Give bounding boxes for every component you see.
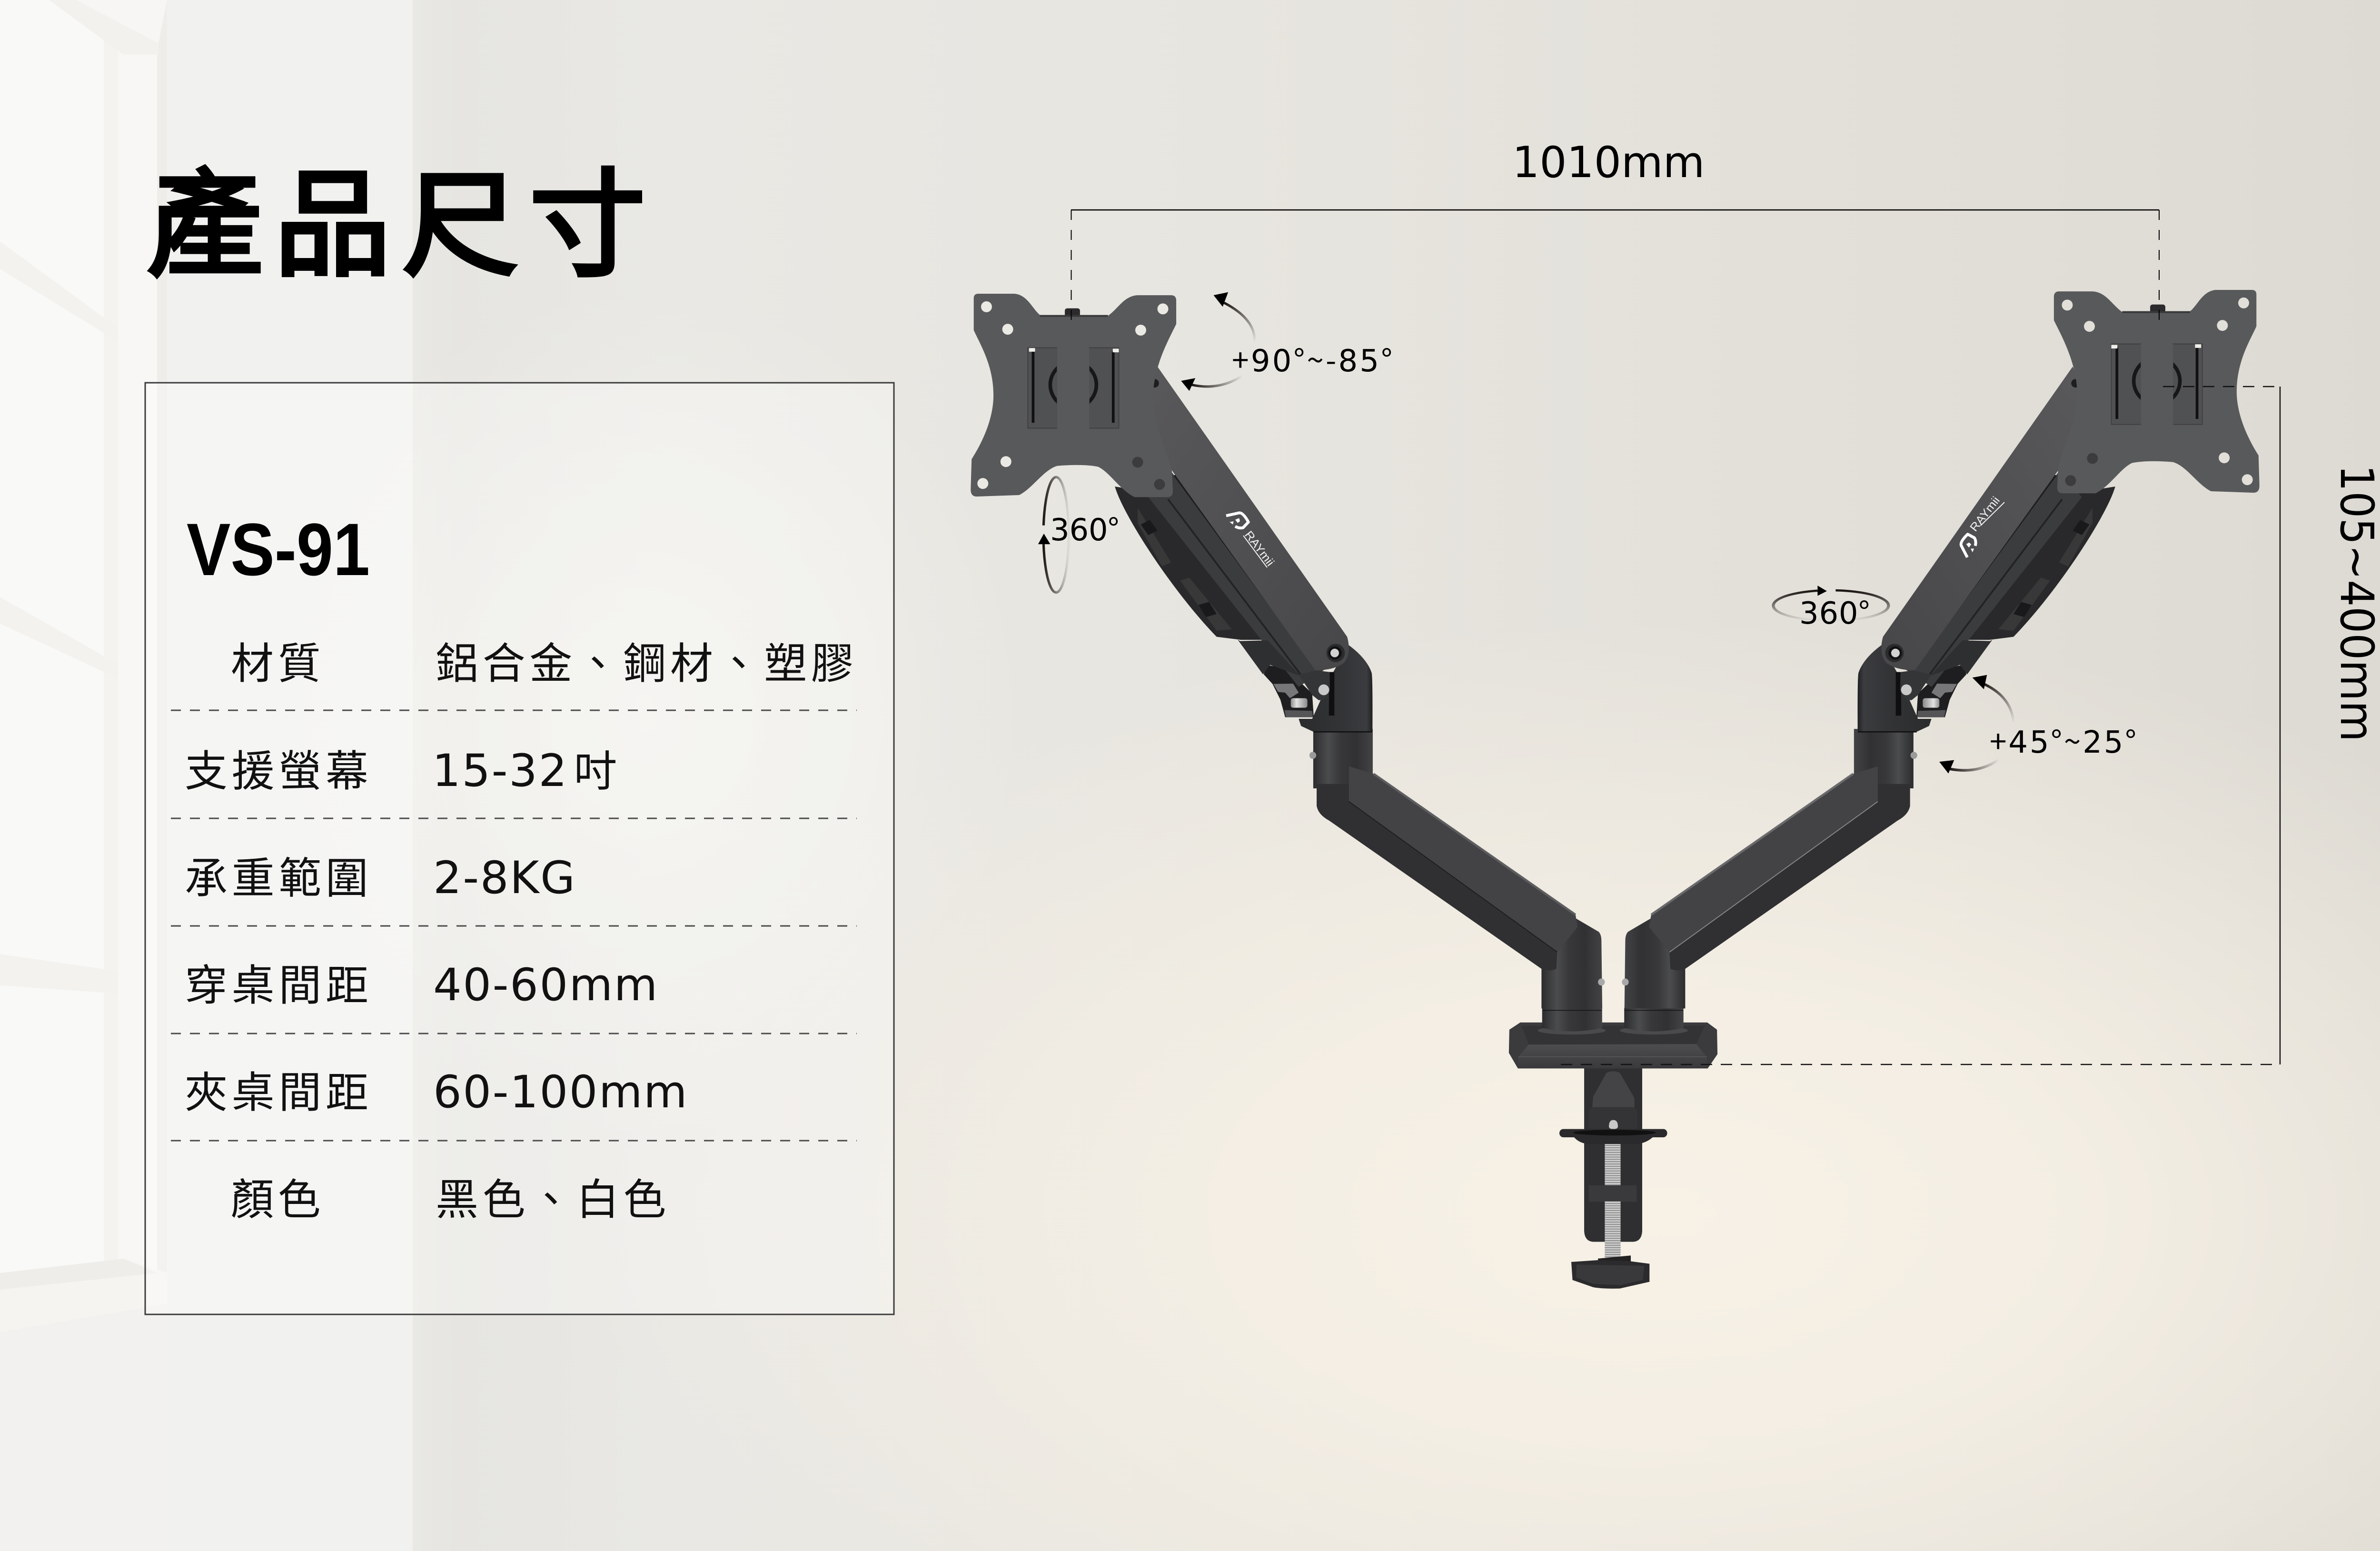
right column collar <box>1620 1007 1688 1034</box>
base plate <box>1509 1007 1717 1068</box>
left column collar <box>1538 1007 1606 1034</box>
row: grommet clearance <box>185 951 659 1013</box>
right joint: link and bolts <box>1885 639 1993 700</box>
row: load range <box>185 844 576 905</box>
model name: VS-91 <box>187 508 370 591</box>
row: colour: 黑色、白色 <box>436 1165 670 1227</box>
row: colour: 顏色 <box>231 1165 325 1227</box>
right upper arm <box>1881 367 2115 687</box>
label: tilt range left: +90°~-85° <box>1232 337 1392 380</box>
right arm: column and forearm <box>1622 729 1917 1008</box>
clamp and screw <box>1559 1067 1667 1289</box>
row: material <box>231 629 858 691</box>
panel: specification table <box>145 383 894 1314</box>
right elbow and tilt mechanism <box>1858 645 1966 732</box>
title: 產品尺寸 <box>147 130 657 299</box>
row: supported screens: 15-32吋 <box>432 736 618 798</box>
row: material: 鋁合金、鋼材、塑膠 <box>436 629 858 691</box>
row: grommet clearance: 40-60mm <box>433 959 659 1011</box>
row: clamp clearance: 60-100mm <box>433 1066 688 1118</box>
logo on right arm <box>1959 494 2004 558</box>
logo on left arm: RAYmii <box>1242 528 1277 568</box>
height dimension line <box>1561 387 2380 1064</box>
right VESA mounting plate <box>2054 290 2260 493</box>
row: clamp clearance <box>185 1058 688 1120</box>
row: load range: 2-8KG <box>433 852 576 904</box>
logo on left arm <box>1226 513 1277 568</box>
rotation arrows: tilt +45 to 25 <box>1939 675 2013 774</box>
width label: 1010mm <box>1512 138 1705 188</box>
row: grommet clearance: 穿桌間距 <box>185 951 372 1013</box>
left VESA mounting plate <box>971 294 1176 497</box>
row: supported screens <box>185 736 618 798</box>
logo on right arm: RAYmii <box>1967 494 2003 534</box>
row: clamp clearance: 夾桌間距 <box>185 1058 372 1120</box>
left upper arm <box>1115 367 1349 687</box>
label: 360 left: 360° <box>1050 506 1119 549</box>
row: colour <box>231 1165 670 1227</box>
row: load range: 承重範圍 <box>185 844 372 905</box>
width dimension line <box>1071 138 2159 327</box>
left elbow and tilt mechanism <box>1264 645 1372 732</box>
left arm: column and forearm <box>1309 729 1605 1008</box>
row: supported screens: 支援螢幕 <box>185 736 372 798</box>
left joint: link and bolts <box>1238 639 1345 700</box>
label: 360 right: 360° <box>1799 589 1870 633</box>
rotation arrows: tilt +90 to -85 <box>1181 292 1255 391</box>
label: tilt range right: +45°~25° <box>1990 718 2136 762</box>
rotation arrow: 360 left <box>1038 477 1069 593</box>
rotation arrow: 360 right <box>1773 586 1888 621</box>
row: material: 材質 <box>231 629 325 691</box>
window at left of the room <box>0 0 167 1551</box>
